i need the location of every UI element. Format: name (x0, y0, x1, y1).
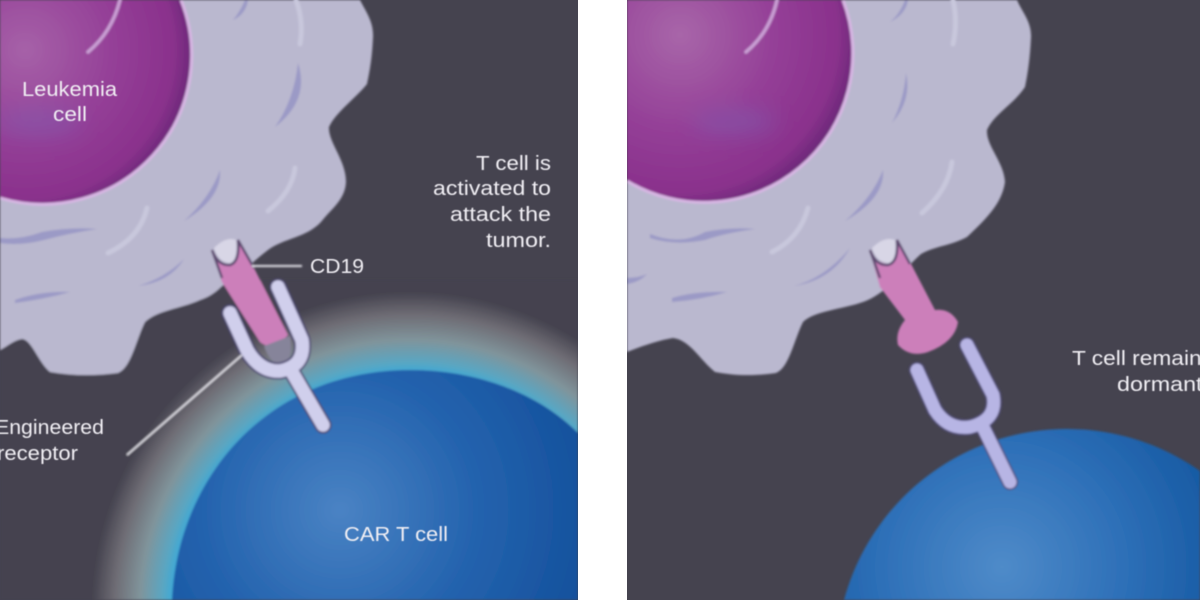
dark membrane marks (0, 0, 301, 303)
label: T cell remains dormant: dormant. (1117, 374, 1200, 396)
CD19 leader line (252, 265, 302, 267)
light membrane marks (108, 0, 301, 253)
nucleus bluish shade (702, 109, 766, 134)
label: CAR T cell: CAR T cell (344, 524, 448, 546)
CD19 crown outline (212, 240, 254, 278)
CD19 stem and bulb (870, 240, 958, 354)
light membrane marks (772, 0, 956, 252)
callout: T cell is activated: tumor. (486, 230, 551, 252)
receptor fork (230, 287, 323, 425)
nucleus highlight stroke (746, 0, 777, 52)
illustration: activated cells (0, 0, 578, 600)
tumor cell body (0, 0, 373, 375)
callout: T cell is activated: activated to (433, 178, 551, 200)
label: leukemia cell: cell (53, 104, 87, 126)
callout: T cell is activated: T cell is (476, 153, 551, 175)
nucleus rim (627, 0, 853, 202)
nucleus bluish shade (18, 113, 71, 136)
CD19 crown outline (870, 240, 910, 278)
labels: activated panel (0, 79, 551, 546)
CD19 antigen (212, 239, 288, 346)
CAR T cell (172, 370, 578, 600)
label: leukemia cell: Leukemia (22, 79, 118, 101)
label: leukemia cell (23, 80, 118, 122)
nucleus rim (0, 0, 192, 204)
panel: dormant T cell (627, 0, 1200, 600)
illustration: dormant cells (627, 0, 1200, 600)
grey inner base of fork (264, 336, 291, 365)
panel background (627, 0, 1200, 600)
receptor leader line (127, 355, 242, 455)
label: T cell remains dormant (1072, 348, 1200, 396)
CD19 pocket (872, 239, 895, 263)
label: CD19: CD19 (310, 256, 364, 278)
panel: activated T cell (0, 0, 578, 600)
CAR T cell (844, 429, 1200, 600)
callout: T cell is activated (433, 153, 551, 252)
CD19 stem (212, 240, 288, 346)
tumor cell body (627, 0, 1031, 375)
label: engineered receptor (0, 417, 104, 465)
panel background (0, 0, 578, 600)
leukemia cell nucleus (627, 0, 853, 202)
nucleus highlight stroke (88, 0, 120, 52)
glow around CAR T cell (0, 280, 578, 600)
leukemia cell nucleus (0, 0, 192, 204)
CD19 pocket (214, 239, 236, 263)
receptor fork (917, 345, 1010, 482)
CD19 antigen with bulb (870, 239, 958, 354)
label: T cell remains dormant: T cell remains (1072, 348, 1200, 370)
callout: T cell is activated: attack the (450, 204, 551, 226)
dark membrane marks (627, 0, 908, 302)
